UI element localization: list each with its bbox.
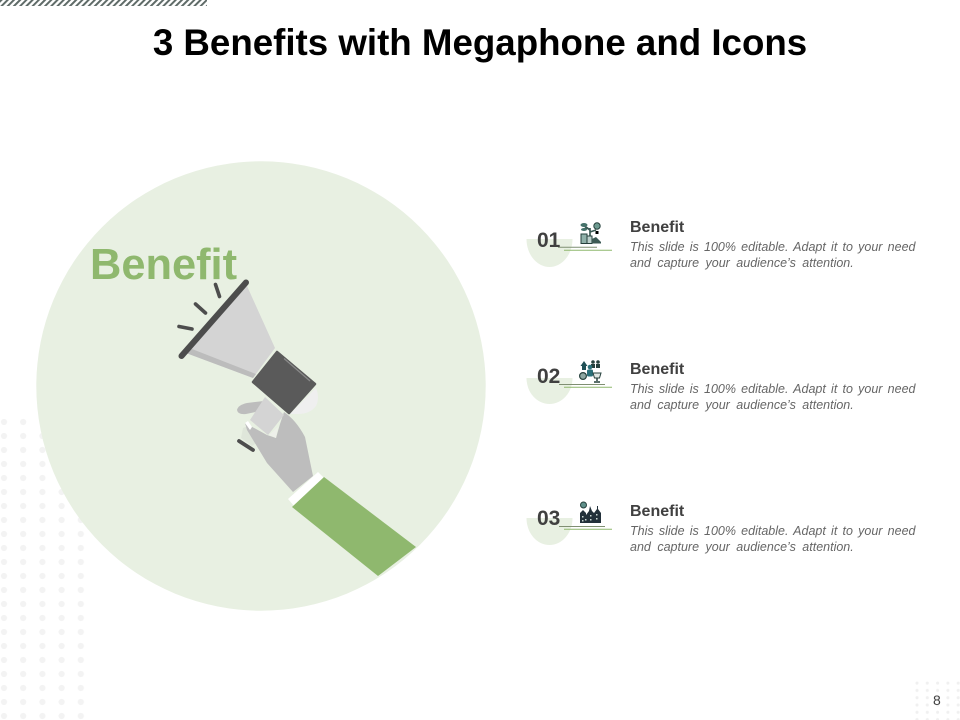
circle heading: Benefit <box>90 241 237 289</box>
number badge 01 <box>526 239 612 267</box>
icon: megaphone held in hand <box>179 282 416 576</box>
dark finger mark <box>239 441 253 450</box>
number 01: 01 <box>537 229 560 252</box>
cone <box>186 286 275 378</box>
icon: people and trophy <box>579 360 602 383</box>
description 03: and capture your audience’s attention. <box>630 540 854 554</box>
number 03: 03 <box>537 507 560 530</box>
benefit 01 <box>526 219 916 270</box>
handle <box>250 397 284 435</box>
description 02: and capture your audience’s attention. <box>630 398 854 412</box>
white back of megaphone <box>290 388 318 414</box>
description 03 <box>630 524 916 554</box>
heading 03: Benefit <box>630 503 684 520</box>
description 01 <box>630 240 916 270</box>
sound ticks <box>179 284 220 329</box>
description 03: This slide is 100% editable. Adapt it to your need <box>630 524 916 538</box>
top hatch strip <box>0 0 207 6</box>
pale green circle <box>36 161 486 611</box>
benefit 03 <box>526 502 916 554</box>
description 02 <box>630 382 916 412</box>
heading 01: Benefit <box>630 219 684 236</box>
benefit 02 <box>526 360 916 412</box>
number badge 02 <box>526 378 612 404</box>
finger nail <box>245 421 252 430</box>
description 01: and capture your audience’s attention. <box>630 256 854 270</box>
icon: plant and buildings <box>580 222 601 244</box>
heading 02: Benefit <box>630 361 684 378</box>
number badge 03 <box>526 518 612 545</box>
page number: 8 <box>933 692 941 708</box>
green sleeve <box>292 477 416 576</box>
body highlight <box>284 358 310 381</box>
title: 3 Benefits with Megaphone and Icons <box>153 22 807 63</box>
palm gap <box>269 427 278 438</box>
white cuff <box>288 472 324 506</box>
rim <box>182 282 246 356</box>
left dot pattern <box>0 415 90 720</box>
thumb <box>237 401 264 414</box>
number 02: 02 <box>537 365 560 388</box>
dark body <box>253 352 315 413</box>
cone shading <box>186 349 256 378</box>
icon: city buildings <box>580 502 601 523</box>
hand <box>245 412 313 492</box>
description 02: This slide is 100% editable. Adapt it to your need <box>630 382 916 396</box>
description 01: This slide is 100% editable. Adapt it to your need <box>630 240 916 254</box>
page number dot pattern <box>912 679 960 720</box>
lower finger <box>241 425 258 446</box>
